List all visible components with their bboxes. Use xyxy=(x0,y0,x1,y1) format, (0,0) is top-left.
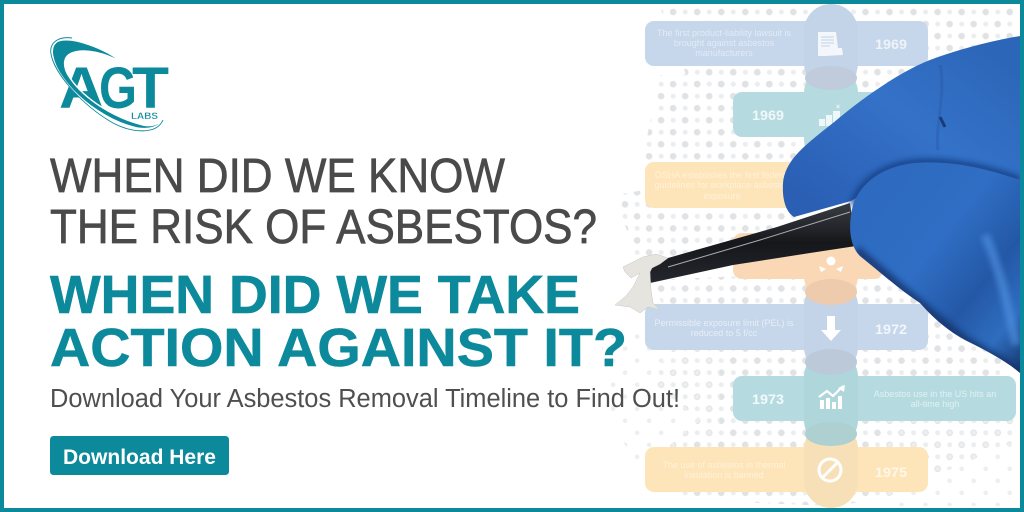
row 3: OSHA: OSHA establishes the first federal xyxy=(655,170,789,180)
row 1: first lawsuit, 1969 xyxy=(645,4,928,90)
logo: AGT Labs: G xyxy=(99,56,137,121)
tweezers xyxy=(650,203,856,283)
heading: risk question xyxy=(50,150,597,254)
logo: AGT Labs: T xyxy=(132,56,169,121)
heading: risk question: THE RISK OF ASBESTOS? xyxy=(50,201,597,254)
icon: prohibition sign xyxy=(819,459,841,481)
download button xyxy=(50,436,229,475)
heading: risk question: WHEN DID WE KNOW xyxy=(50,150,506,203)
row 4: orange xyxy=(733,215,883,303)
download button: Download Here xyxy=(63,445,216,469)
icon: rising chart xyxy=(820,396,842,409)
icon: rising bars xyxy=(819,111,840,126)
row 2: 1969: × xyxy=(836,104,840,111)
icon: document xyxy=(818,32,843,56)
row 1: first lawsuit, 1969: manufacturers xyxy=(695,48,753,58)
row 5: PEL, 1972: reduced to 5 f/cc xyxy=(691,328,758,338)
row 5: PEL, 1972: 1972 xyxy=(875,321,907,337)
timeline infographic, faded xyxy=(645,4,1016,508)
row 3: OSHA: exposure xyxy=(703,191,741,201)
logo: AGT Labs: A xyxy=(59,56,104,121)
glove: lower finger xyxy=(850,162,1020,373)
icon: skull xyxy=(819,256,843,272)
row 1: first lawsuit, 1969: The first product-liability lawsuit is xyxy=(657,28,792,38)
heading: action question xyxy=(50,265,627,378)
row 3: OSHA: guidelines for workplace asbestos xyxy=(654,180,790,190)
glove: crease between fingers xyxy=(853,162,1020,205)
row 5: PEL, 1972 xyxy=(645,279,928,374)
logo swoosh xyxy=(52,40,163,129)
row 5: PEL, 1972: Permissible exposure limit (PEL) is xyxy=(654,318,794,328)
row 6: 1973: Asbestos use in the US hits an xyxy=(874,389,996,399)
row 1: first lawsuit, 1969: 1969 xyxy=(875,36,907,52)
subheading: Download Your Asbestos Removal Timeline to Find Out! xyxy=(50,385,680,413)
row 6: 1973: 1973 xyxy=(752,391,784,407)
row 7: thermal insulation, 1975: 1975 xyxy=(875,464,907,480)
glove: upper finger xyxy=(783,36,1020,217)
gloved hand xyxy=(783,36,1022,375)
row 6: 1973 xyxy=(733,349,1016,447)
row 1: first lawsuit, 1969: brought against asbestos xyxy=(674,38,775,48)
heading: action question: WHEN DID WE TAKE xyxy=(50,265,580,325)
logo: AGT Labs: LABS xyxy=(131,111,158,122)
heading: action question: ACTION AGAINST IT? xyxy=(50,318,627,378)
row 2: 1969: 1969 xyxy=(752,107,784,123)
row 7: thermal insulation, 1975: insulation is banned xyxy=(684,470,764,480)
icon: down arrow xyxy=(821,316,841,341)
row 3: OSHA xyxy=(645,162,825,208)
halftone dot background xyxy=(600,8,1018,506)
row 6: 1973: all-time high xyxy=(911,399,959,409)
row 7: thermal insulation, 1975: The use of asbestos in thermal xyxy=(662,460,786,470)
glove: shading on lower finger xyxy=(856,235,1022,375)
asbestos fibre xyxy=(615,254,668,313)
row 2: 1969 xyxy=(733,66,883,166)
row 7: thermal insulation, 1975 xyxy=(645,422,928,508)
logo: AGT Labs xyxy=(51,38,169,131)
